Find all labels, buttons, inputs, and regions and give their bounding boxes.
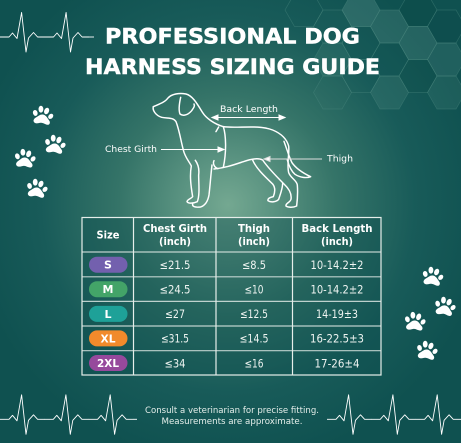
title: PROFESSIONAL DOG [105, 24, 360, 50]
icon: paw [25, 177, 50, 199]
text: chest girth: Chest Girth [105, 145, 157, 155]
table header: Back Length [302, 223, 372, 235]
table header: (inch) [159, 236, 191, 248]
sizing table [82, 218, 381, 375]
table values [160, 258, 364, 370]
label: chest girth [105, 145, 224, 155]
table values: ≤10 [244, 282, 264, 296]
table fill [82, 218, 381, 375]
table values: 10-14.2±2 [310, 258, 364, 272]
size pills: L [104, 308, 112, 321]
title [85, 24, 380, 80]
icon: paw [415, 339, 440, 361]
icon: heartbeat line top left [0, 12, 94, 52]
size pills [89, 257, 128, 371]
table values: ≤8.5 [242, 258, 266, 272]
text: back length: Back Length [220, 105, 278, 115]
arrow: back length [212, 115, 285, 120]
footer note [145, 406, 319, 427]
size pills: 2XL [97, 357, 119, 370]
table values: ≤12.5 [240, 307, 268, 321]
table values: ≤21.5 [160, 258, 190, 272]
size pills: S [104, 259, 112, 272]
icon: heartbeat line bottom right [327, 395, 461, 434]
icon: dog outline [153, 93, 311, 207]
label: thigh [264, 154, 353, 164]
hexagon pattern [285, 0, 461, 109]
icon: paw [13, 148, 37, 168]
icon: paw [421, 265, 445, 287]
table header: Chest Girth [143, 223, 207, 235]
table header: Thigh [238, 223, 270, 235]
icon: paw [43, 133, 68, 155]
paw prints right [403, 265, 458, 361]
paw prints left [13, 104, 68, 199]
table header: (inch) [238, 236, 270, 248]
icon: paw [403, 311, 427, 331]
table values: ≤27 [165, 307, 185, 321]
table header: Size [96, 230, 120, 242]
footer note: Measurements are approximate. [162, 417, 302, 427]
table values: 10-14.2±2 [310, 282, 364, 296]
label: back length [212, 105, 285, 120]
table values: ≤14.5 [240, 332, 268, 346]
icon: heartbeat line bottom left [0, 395, 137, 434]
table values: ≤24.5 [160, 282, 190, 296]
footer note: Consult a veterinarian for precise fitting. [145, 406, 319, 416]
size pills: M [103, 283, 113, 296]
table values: ≤31.5 [161, 332, 189, 346]
icon: paw [433, 295, 458, 317]
table header: (inch) [321, 236, 353, 248]
table values: ≤34 [164, 356, 186, 370]
icon: paw [31, 104, 55, 126]
title: HARNESS SIZING GUIDE [85, 55, 380, 80]
table values: 14-19±3 [316, 307, 358, 321]
size pills: XL [100, 332, 116, 345]
table header [96, 223, 372, 248]
table values: 16-22.5±3 [310, 332, 364, 346]
arrow: thigh [264, 156, 322, 162]
table values: 17-26±4 [314, 356, 360, 370]
table values: ≤16 [244, 356, 264, 370]
arrow: chest girth [161, 147, 224, 152]
text: thigh: Thigh [326, 154, 353, 164]
